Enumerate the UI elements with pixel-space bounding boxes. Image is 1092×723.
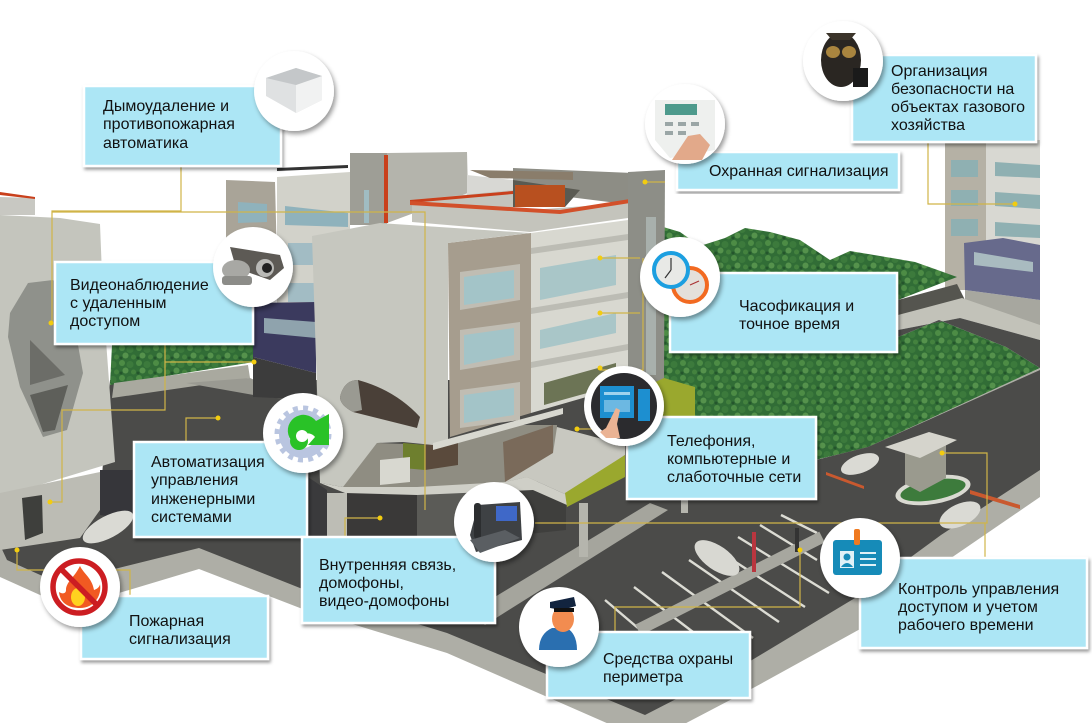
panel: intercom: Внутренняя связь, — [319, 557, 456, 574]
icon: no fire — [40, 547, 120, 627]
panel: fire alarm — [81, 596, 268, 659]
parking markings — [605, 515, 829, 638]
trees — [660, 226, 1040, 460]
connector lines — [14, 142, 1018, 632]
icon: gear — [263, 393, 343, 473]
panel: clocks: точное время — [739, 316, 840, 333]
panel: telephony: слаботочные сети — [667, 469, 801, 486]
panel: automation — [134, 442, 307, 537]
panel: automation: системами — [151, 509, 232, 526]
panel: gas safety: хозяйства — [891, 117, 965, 134]
panel: gas safety — [852, 55, 1036, 142]
panel: automation: Автоматизация — [151, 454, 265, 471]
icon: alarm keypad — [645, 84, 725, 164]
panel: gas safety: объектах газового — [891, 99, 1025, 116]
parked cars and barrier — [78, 449, 1020, 583]
panel: intercom — [302, 537, 495, 623]
main building lower floors — [308, 378, 695, 557]
panel: gas safety: Организация — [891, 63, 988, 80]
panel: access control: рабочего времени — [898, 617, 1034, 634]
sidewalk — [470, 503, 668, 625]
panel: fire alarm: сигнализация — [129, 631, 231, 648]
panel: access control — [860, 558, 1087, 648]
panel: video surveillance: Видеонаблюдение — [70, 277, 209, 294]
panel: gas safety: безопасности на — [891, 81, 1014, 98]
icon: gas mask — [803, 21, 883, 101]
icon: clocks — [640, 237, 720, 317]
panel: clocks — [670, 273, 897, 352]
icon: camera — [213, 227, 293, 307]
side road — [898, 284, 1040, 368]
panel: access control: Контроль управления — [898, 581, 1059, 598]
panel: intercom: домофоны, — [319, 575, 404, 592]
panel: video surveillance: с удаленным — [70, 295, 167, 312]
icon: touch screen — [584, 366, 664, 446]
panel: smoke removal — [84, 86, 281, 166]
icon: guard — [519, 587, 599, 667]
panel: perimeter: Средства охраны — [603, 651, 733, 668]
panel: smoke removal: Дымоудаление и — [103, 98, 229, 115]
panel: telephony: Телефония, — [667, 433, 755, 450]
guard booth — [885, 432, 973, 510]
left building — [0, 192, 115, 550]
panel: perimeter: периметра — [603, 669, 683, 686]
panel: burglar alarm — [677, 152, 899, 190]
ground curb — [0, 368, 1040, 723]
icon: id badge — [820, 518, 900, 598]
panel: telephony: компьютерные и — [667, 451, 790, 468]
panel: automation: инженерными — [151, 491, 255, 508]
panel: burglar alarm: Охранная сигнализация — [709, 163, 889, 180]
panel: smoke removal: автоматика — [103, 135, 188, 152]
roof terrace — [410, 168, 633, 232]
panel: smoke removal: противопожарная — [103, 116, 235, 133]
icon: smoke detector — [254, 51, 334, 131]
panel: telephony — [627, 417, 816, 499]
main building — [312, 170, 665, 487]
right background building — [945, 140, 1040, 338]
icon: desk phone — [454, 482, 534, 562]
panel: intercom: видео-домофоны — [319, 593, 449, 610]
panel: perimeter — [547, 632, 750, 698]
panel: access control: доступом и учетом — [898, 599, 1038, 616]
panel: clocks: Часофикация и — [739, 298, 854, 315]
panel: fire alarm: Пожарная — [129, 613, 204, 630]
panel: automation: управления — [151, 472, 238, 489]
panel: video surveillance — [55, 262, 253, 344]
background yard — [100, 345, 300, 520]
asphalt — [0, 370, 1040, 715]
central back building — [226, 152, 513, 400]
panel: video surveillance: доступом — [70, 313, 140, 330]
